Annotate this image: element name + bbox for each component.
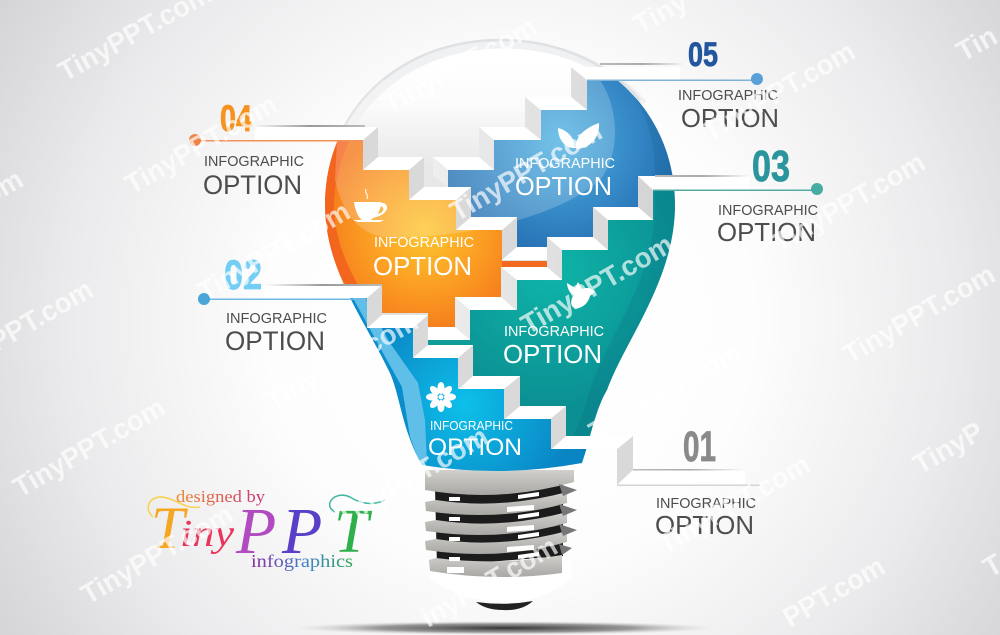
dark edge band right <box>574 98 675 454</box>
glass rim <box>336 38 646 142</box>
leader lines 02 <box>198 284 382 305</box>
inner label orange <box>373 235 474 281</box>
segment 02 cyan <box>350 298 586 471</box>
logo: designed by TinyPPT infographics: T <box>151 495 188 561</box>
watermarks: TinyPPT.com <box>260 305 423 417</box>
label 01: OPTION <box>655 510 754 540</box>
inner label teal: OPTION <box>503 339 602 369</box>
leader lines 04 <box>189 125 365 146</box>
label 03: INFOGRAPHIC <box>718 203 818 219</box>
watermarks: TinyPPT.com <box>838 258 1000 370</box>
top faces <box>363 97 653 449</box>
orange strip <box>502 261 547 267</box>
side faces <box>433 67 653 340</box>
segment 05 blue <box>448 81 672 247</box>
watermarks: TinyPPT.com <box>698 35 860 147</box>
inner label cyan: OPTION <box>428 434 522 461</box>
label 01 <box>655 496 756 540</box>
number 04: 04 <box>220 98 252 139</box>
inner label blue: INFOGRAPHIC <box>515 156 615 172</box>
watermarks: TinyPPT.com <box>768 146 930 258</box>
glass highlight <box>335 80 615 238</box>
logo: designed by TinyPPT infographics: iny <box>180 513 234 555</box>
logo: designed by TinyPPT infographics: infographics <box>251 551 353 571</box>
label 05 <box>678 88 779 133</box>
watermarks: TinyPPT.com <box>8 391 170 503</box>
teal strip <box>428 340 470 345</box>
label 03: OPTION <box>717 217 816 247</box>
watermarks: TinyPPT.com <box>652 448 815 560</box>
glass bulb body <box>325 40 675 471</box>
label 02 <box>225 311 327 356</box>
inner label cyan <box>428 418 522 461</box>
inner label blue <box>515 156 615 201</box>
watermarks: TinyPPT.com <box>76 498 238 610</box>
staircase faces <box>255 67 750 485</box>
callout 04 <box>189 98 365 200</box>
label 05: INFOGRAPHIC <box>678 88 778 104</box>
logo: designed by TinyPPT infographics: T <box>334 498 373 566</box>
logo: designed by TinyPPT infographics: P <box>281 495 322 568</box>
number 05: 05 <box>688 36 718 74</box>
ground shadow <box>293 621 717 635</box>
label 02: OPTION <box>225 326 325 356</box>
leader lines 03 <box>653 175 823 195</box>
callout bars <box>255 67 750 485</box>
bulb screw base <box>425 470 577 610</box>
logo: designed by TinyPPT infographics: P <box>235 495 276 568</box>
light edge band left <box>353 298 427 464</box>
label 02: INFOGRAPHIC <box>226 311 327 327</box>
inner label blue: OPTION <box>515 171 612 201</box>
label 03 <box>717 203 818 247</box>
callout 01 <box>617 423 760 540</box>
dark edge band left <box>350 298 418 458</box>
inner label cyan: INFOGRAPHIC <box>430 418 513 433</box>
callout 02 <box>198 251 382 356</box>
label 01: INFOGRAPHIC <box>656 496 756 512</box>
label 04 <box>203 154 304 200</box>
inner label orange: OPTION <box>373 251 472 281</box>
callout 05 <box>587 36 779 133</box>
watermarks: TinyPPT.com <box>330 420 493 532</box>
logo: designed by TinyPPT infographics <box>148 487 385 571</box>
watermarks: PPT.com <box>778 550 890 633</box>
leader lines 05 <box>587 63 763 85</box>
watermarks: TinyPPT.com <box>444 115 607 227</box>
watermarks: TinyPPT.com <box>378 11 542 120</box>
inner label teal <box>503 324 604 369</box>
segment 03 teal <box>470 190 690 436</box>
icon: leaves <box>558 123 599 149</box>
watermarks: TinyPPT.com <box>584 335 746 447</box>
label 05: OPTION <box>681 103 779 133</box>
leader lines 01 <box>617 469 760 486</box>
number 01: 01 <box>683 423 716 471</box>
watermarks: TinyPPT.com <box>516 228 678 340</box>
number 02: 02 <box>224 251 262 298</box>
icon: flower <box>426 382 456 412</box>
colored segments <box>325 81 675 471</box>
watermarks: TinyPPT.com <box>192 195 355 307</box>
inner label teal: INFOGRAPHIC <box>504 324 604 340</box>
callout 03 <box>653 142 823 247</box>
label 04: OPTION <box>203 170 302 200</box>
watermarks: TinyP <box>908 415 989 480</box>
logo: designed by TinyPPT infographics: designed by <box>176 487 266 506</box>
light bulb <box>255 38 675 610</box>
label 04: INFOGRAPHIC <box>204 154 304 170</box>
watermarks: TinyPPT.com <box>120 88 282 200</box>
icon: bird <box>567 282 595 309</box>
icon: coffee cup <box>353 189 387 222</box>
watermarks: inyPPT.com <box>416 530 563 633</box>
orange rim <box>325 140 358 285</box>
inner label orange: INFOGRAPHIC <box>374 235 474 251</box>
segment 04 orange <box>320 140 502 327</box>
number 03: 03 <box>752 142 790 191</box>
